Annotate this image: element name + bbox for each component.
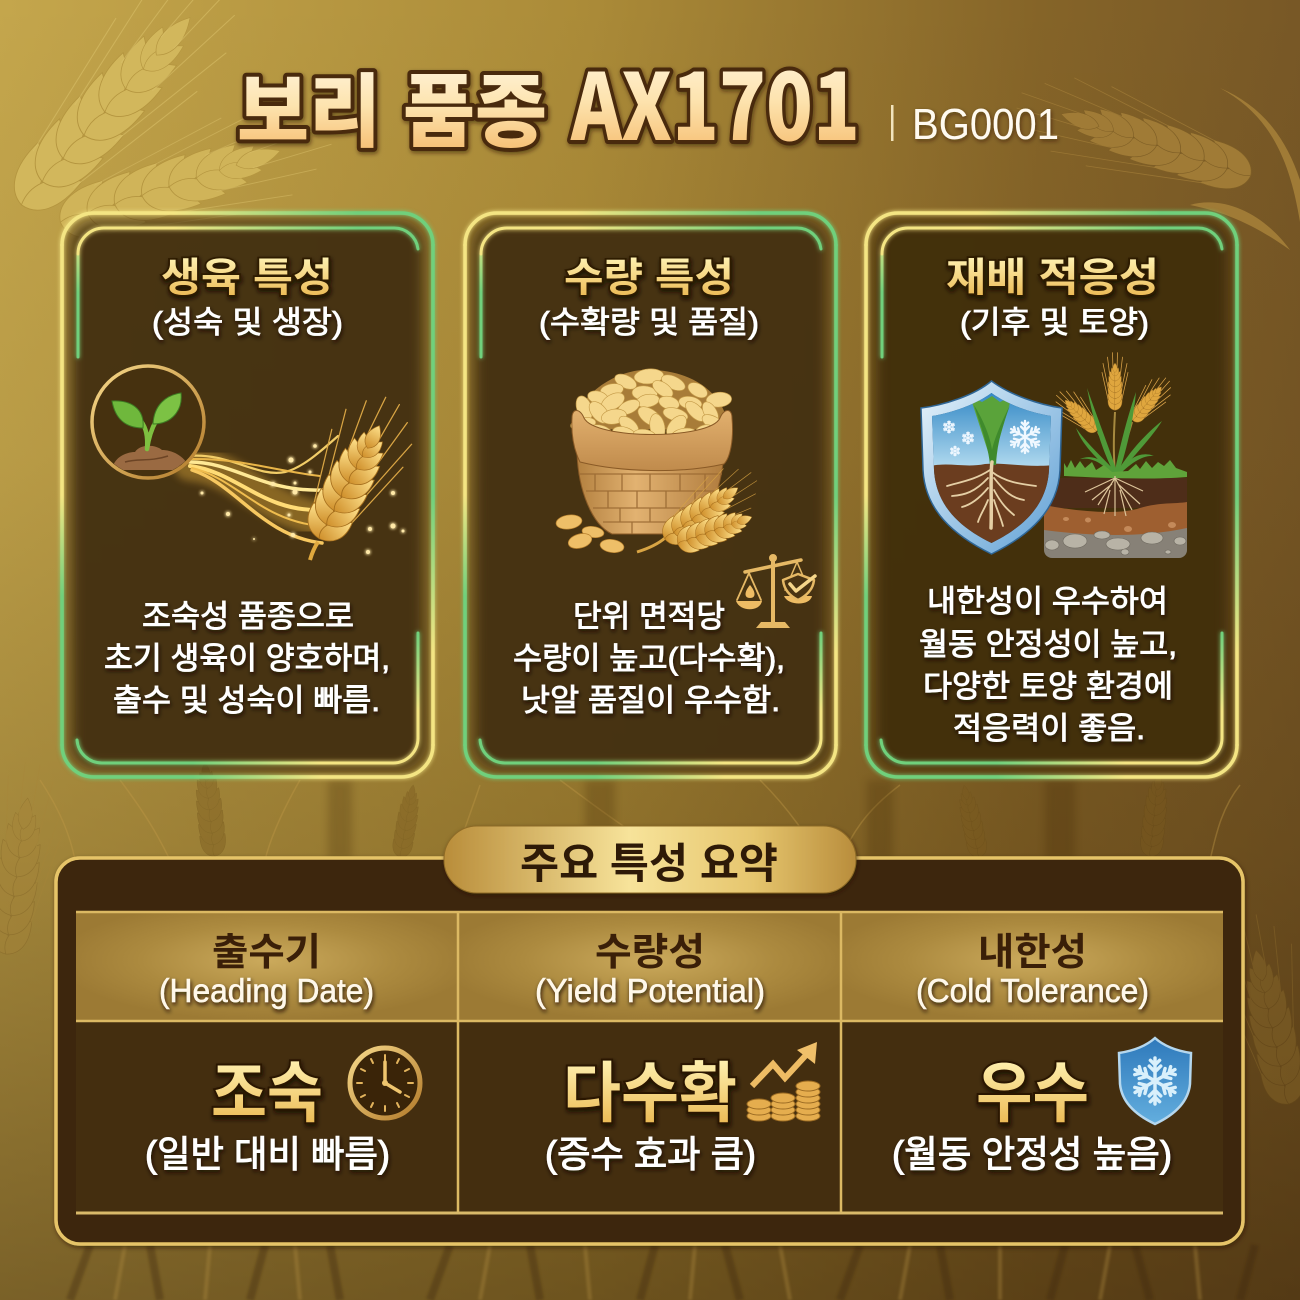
body text	[104, 599, 390, 718]
value cell: excellent cold tolerance: (월동 안정성 높음)	[892, 1134, 1172, 1175]
body text: 낫알 품질이 우수함.	[521, 683, 780, 718]
wheat ear	[637, 455, 769, 562]
header cell: heading date	[76, 911, 458, 1021]
panel: cultivation adaptability	[866, 213, 1237, 777]
title: separator	[891, 105, 894, 141]
value cell: early maturity	[145, 1048, 420, 1175]
icon: frost shield	[921, 381, 1062, 554]
body text: 출수 및 성숙이 빠름.	[113, 683, 380, 718]
golden swoosh	[188, 436, 338, 543]
grain heap	[570, 368, 732, 446]
wheat ear	[282, 382, 428, 561]
snowflakes	[943, 421, 1041, 456]
value cell: high yield	[545, 1042, 820, 1175]
body text: 다양한 토양 환경에	[923, 669, 1173, 704]
body text: 조숙성 품종으로	[142, 599, 354, 634]
wheat ear: top left large	[0, 0, 268, 247]
body text	[513, 599, 785, 718]
header cell: yield potential	[458, 911, 841, 1021]
wheat ear: right middle	[1211, 908, 1300, 1117]
sparkles	[200, 444, 404, 554]
body text: 단위 면적당	[573, 599, 725, 634]
body text: 적응력이 좋음.	[953, 711, 1145, 746]
header cell: yield potential: (Yield Potential)	[535, 972, 765, 1009]
plant ears	[1049, 353, 1178, 475]
icon: rising coins	[747, 1042, 820, 1121]
heading: 재배 적응성	[946, 256, 1159, 300]
plant leaves	[1076, 388, 1162, 476]
title: main text	[237, 34, 860, 167]
icon: basket of grain	[555, 368, 815, 628]
vertical shading at band	[340, 780, 1060, 860]
icon: scale with check	[736, 554, 815, 628]
body text: 내한성이 우수하여	[927, 584, 1168, 619]
header cell: yield potential: 수량성	[595, 932, 705, 974]
body text: 수량이 높고(다수확),	[513, 641, 785, 676]
value cell: excellent cold tolerance: 우수	[976, 1056, 1089, 1130]
subheading: (수확량 및 품질)	[539, 305, 759, 340]
header cell: cold tolerance: 내한성	[978, 932, 1087, 974]
wheat ear: top left lower	[39, 88, 343, 271]
header cell: cold tolerance: (Cold Tolerance)	[916, 972, 1149, 1009]
header cell: cold tolerance	[841, 911, 1223, 1021]
header cell: heading date: (Heading Date)	[159, 972, 374, 1009]
heading: 수량 특성	[564, 256, 734, 300]
icon: clock	[350, 1048, 420, 1118]
basket brick pattern	[580, 474, 722, 534]
wheat ear: top right	[1007, 61, 1269, 217]
value cell: excellent cold tolerance	[892, 1038, 1191, 1175]
title: main text: 보리 품종	[237, 48, 547, 164]
panel: yield characteristics	[465, 213, 836, 777]
title: code: BG0001	[912, 100, 1059, 149]
icon: seedling to wheat growth	[92, 366, 428, 561]
summary heading pill	[444, 826, 856, 893]
icon: snow shield	[1119, 1038, 1191, 1124]
roots	[947, 462, 1036, 528]
basket rim	[572, 410, 733, 471]
value cell: early maturity: (일반 대비 빠름)	[145, 1134, 390, 1175]
panel: growth characteristics	[62, 213, 433, 777]
value cell: early maturity: 조숙	[211, 1056, 323, 1130]
subheading: (성숙 및 생장)	[152, 305, 343, 340]
vertical streaks at bottom	[70, 1245, 1255, 1300]
soil layers	[1044, 478, 1187, 560]
title: main text: AX1701	[570, 34, 860, 167]
value cell: high yield: (증수 효과 큼)	[545, 1134, 756, 1175]
title	[237, 34, 1059, 167]
wheat band between cards and summary	[40, 761, 1240, 862]
summary heading pill: 주요 특성 요약	[520, 840, 778, 887]
subheading: (기후 및 토양)	[960, 305, 1149, 340]
grass	[1064, 460, 1187, 479]
leaf: top right	[1190, 88, 1300, 250]
illustration: soil and plant	[1044, 353, 1187, 560]
panel: key characteristics summary	[56, 826, 1243, 1244]
summary table	[76, 911, 1223, 1213]
loose grains	[555, 513, 625, 554]
body text: 초기 생육이 양호하며,	[104, 641, 390, 676]
header cell: heading date: 출수기	[212, 932, 321, 974]
body text: 월동 안정성이 높고,	[919, 627, 1177, 662]
heading: 생육 특성	[161, 256, 333, 300]
wheat ear: left middle	[0, 758, 71, 964]
body text	[919, 584, 1177, 746]
basket body	[577, 452, 724, 534]
plant roots	[1085, 476, 1143, 516]
seedling badge	[92, 366, 204, 478]
value cell: high yield: 다수확	[563, 1056, 737, 1130]
